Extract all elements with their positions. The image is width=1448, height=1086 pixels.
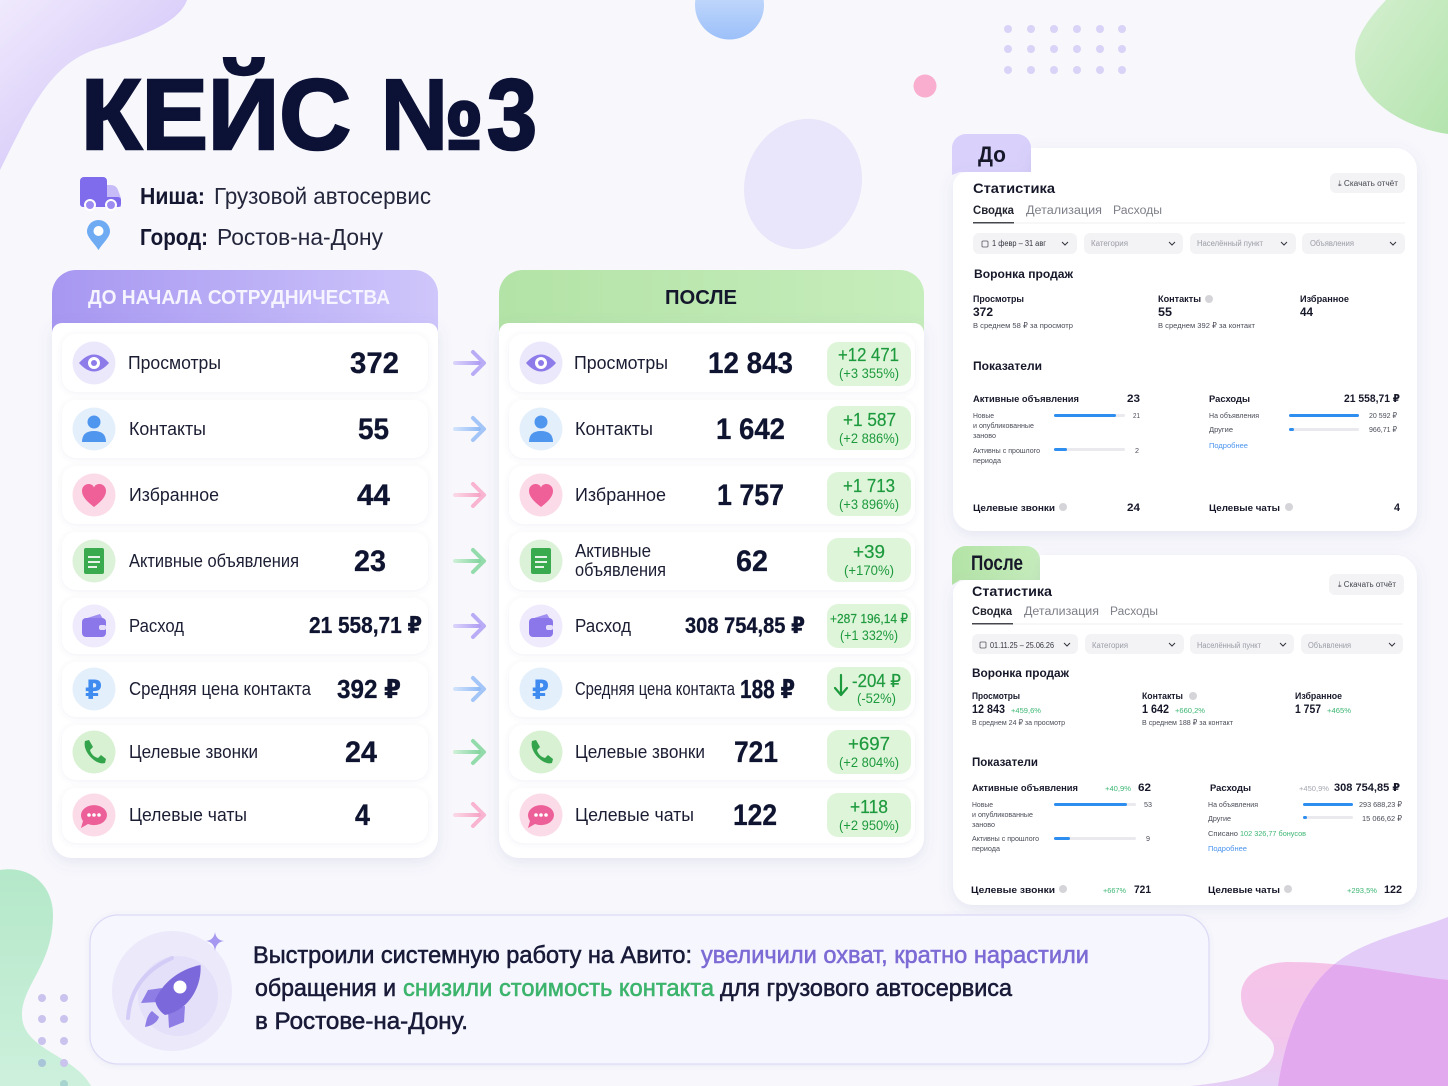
metrics <box>972 755 1402 853</box>
callout text: снизили стоимость контакта <box>403 975 715 1002</box>
filters: 01.11.25 – 25.06.26 <box>990 641 1054 650</box>
icon: map pin <box>87 220 110 250</box>
metrics: 23 <box>1127 393 1140 405</box>
button: download <box>1330 173 1405 193</box>
targeted calls and chats <box>971 884 1402 896</box>
sales funnel: 1 642 <box>1142 704 1169 716</box>
row: Расход <box>62 598 428 654</box>
metrics: Подробнее <box>1209 441 1248 450</box>
row: Средняя цена контакта: Средняя цена контакта <box>129 679 312 699</box>
row: Целевые чаты: Целевые чаты <box>575 805 694 825</box>
callout card <box>90 915 1209 1064</box>
row: Избранное <box>509 466 915 524</box>
row: Активные объявления: (+170%) <box>844 562 894 578</box>
row: Контакты: (+2 886%) <box>839 430 899 446</box>
row: Целевые звонки <box>509 725 915 780</box>
niche row <box>80 177 431 210</box>
row: Целевые чаты: 4 <box>355 799 370 832</box>
arrow: calls <box>453 741 484 763</box>
row: Избранное: Избранное <box>575 485 666 505</box>
targeted calls and chats: 721 <box>1134 884 1151 896</box>
row: Средняя цена контакта: 392 ₽ <box>337 674 401 704</box>
row: Целевые звонки <box>62 725 428 780</box>
row: Просмотры: +12 471 <box>838 345 899 365</box>
metrics: На объявления <box>1208 800 1258 809</box>
niche text: Ниша: <box>140 183 205 209</box>
row: Расход: (+1 332%) <box>840 627 898 643</box>
metrics: +450,9% <box>1299 784 1329 793</box>
sales funnel: Просмотры <box>972 691 1020 701</box>
sales funnel: Воронка продаж <box>972 666 1069 680</box>
icon: truck <box>80 177 121 210</box>
filters <box>973 233 1405 254</box>
targeted calls and chats: 24 <box>1127 502 1141 514</box>
background blob: bottom right purple <box>1278 917 1448 1086</box>
metrics: Активны с прошлого <box>972 834 1039 843</box>
filters: Объявления <box>1310 239 1354 248</box>
sales funnel <box>972 666 1351 727</box>
row: Контакты: Контакты <box>129 419 206 439</box>
sales funnel: Просмотры <box>973 294 1024 304</box>
tabs: Сводка <box>973 205 1015 217</box>
row: Контакты: Контакты <box>575 419 653 439</box>
row: Целевые чаты <box>509 788 915 843</box>
metrics: и опубликованные <box>972 810 1033 819</box>
button: download: ⤓ Скачать отчёт <box>1338 580 1396 589</box>
metrics: Показатели <box>972 755 1038 769</box>
panel header: after <box>499 270 924 345</box>
arrow: views <box>453 352 484 374</box>
row: Активные объявления: Активные <box>575 541 651 561</box>
filters: Категория <box>1092 641 1128 650</box>
filters: Объявления <box>1308 641 1351 650</box>
row: Расход: Расход <box>575 616 631 636</box>
metrics: Расходы <box>1209 394 1250 405</box>
title: 3 <box>487 59 537 171</box>
row: Контакты: 55 <box>358 413 389 446</box>
row: Избранное <box>62 466 428 524</box>
arrow: spend <box>453 615 484 637</box>
targeted calls and chats: 4 <box>1394 502 1401 514</box>
row: Просмотры: (+3 355%) <box>839 365 899 381</box>
row: Активные объявления <box>509 532 915 590</box>
sales funnel: +660,2% <box>1175 706 1205 715</box>
row: Целевые звонки: (+2 804%) <box>839 754 899 770</box>
row: Избранное: (+3 896%) <box>839 496 899 512</box>
background blob: bottom left green <box>0 869 91 1086</box>
background blob: top left lavender <box>0 0 187 170</box>
metrics: Активные объявления <box>972 783 1078 794</box>
callout text: обращения и <box>255 975 396 1002</box>
sales funnel: В среднем 392 ₽ за контакт <box>1158 321 1256 330</box>
metrics: 966,71 ₽ <box>1369 425 1397 434</box>
row: Средняя цена контакта <box>509 662 915 717</box>
row: Просмотры: Просмотры <box>128 353 221 373</box>
row: Целевые звонки: Целевые звонки <box>129 742 258 762</box>
sales funnel: 372 <box>973 307 993 319</box>
callout text: в Ростове-на-Дону. <box>255 1008 468 1035</box>
row: Средняя цена контакта: -204 ₽ <box>852 671 901 691</box>
row: Активные объявления: 62 <box>736 545 768 578</box>
row: Активные объявления: Активные объявления <box>129 551 299 571</box>
tabs: Расходы <box>1113 205 1162 217</box>
targeted calls and chats: 122 <box>1384 884 1402 896</box>
row: Просмотры: 12 843 <box>708 347 793 380</box>
row: Целевые чаты <box>62 788 428 843</box>
metrics: Новые <box>972 800 993 809</box>
metrics: На объявления <box>1209 411 1259 420</box>
heading: statistics: Статистика <box>973 180 1055 196</box>
metrics: 21 558,71 ₽ <box>1344 393 1400 405</box>
sales funnel: В среднем 24 ₽ за просмотр <box>972 718 1065 727</box>
screenshot panel: before <box>952 134 1417 531</box>
callout: conclusion <box>90 915 1209 1064</box>
tab label: До <box>978 142 1006 167</box>
arrow: contacts <box>453 418 484 440</box>
arrow: contact price <box>453 678 484 700</box>
background circle: top blue <box>695 0 764 40</box>
row: Целевые звонки: 721 <box>734 736 778 769</box>
metrics: 293 688,23 ₽ <box>1359 800 1402 809</box>
targeted calls and chats: +293,5% <box>1347 886 1377 895</box>
callout text: для грузового автосервиса <box>720 975 1013 1002</box>
tab label: После <box>971 552 1023 575</box>
row: Активные объявления <box>62 532 428 590</box>
callout text: Выстроили системную работу на Авито: <box>253 942 692 969</box>
row: Целевые чаты: +118 <box>850 797 888 817</box>
callout text <box>253 942 1089 1035</box>
button: download <box>1329 574 1404 595</box>
metrics: 15 066,62 ₽ <box>1362 814 1402 823</box>
tabs <box>972 606 1403 624</box>
targeted calls and chats: Целевые чаты <box>1208 885 1280 896</box>
row: Избранное: 44 <box>357 479 390 512</box>
panel: after <box>499 270 924 858</box>
sales funnel <box>973 267 1349 330</box>
sales funnel: 44 <box>1300 307 1314 319</box>
arrow: chats <box>453 804 484 826</box>
arrow: favourites <box>453 484 484 506</box>
metrics: +40,9% <box>1105 784 1131 793</box>
row: Расход: +287 196,14 ₽ <box>830 611 908 626</box>
callout text: увеличили охват, кратно нарастили <box>701 942 1089 969</box>
title <box>81 58 537 171</box>
city text: Ростов-на-Дону <box>217 224 383 250</box>
row: Средняя цена контакта: Средняя цена контакта <box>575 679 736 699</box>
row: Просмотры <box>62 334 428 392</box>
metrics: и опубликованные <box>973 421 1034 430</box>
row: Контакты: +1 587 <box>843 410 896 430</box>
city text <box>140 224 383 250</box>
tabs: Детализация <box>1024 606 1099 618</box>
sales funnel: Избранное <box>1300 294 1349 304</box>
panel: before <box>52 270 438 858</box>
card: before <box>953 148 1417 531</box>
filters: Населённый пункт <box>1197 641 1261 650</box>
city row <box>87 220 383 250</box>
row: Контакты: 1 642 <box>716 413 785 446</box>
arrow: listings <box>453 550 484 572</box>
metrics: 20 592 ₽ <box>1369 411 1397 420</box>
metrics: 21 <box>1133 411 1140 420</box>
row: Просмотры: Просмотры <box>574 353 668 373</box>
metrics: Новые <box>973 411 994 420</box>
filters: Населённый пункт <box>1197 239 1263 248</box>
metrics: заново <box>972 820 995 829</box>
sales funnel: Избранное <box>1295 691 1342 701</box>
niche text: Грузовой автосервис <box>214 183 431 209</box>
panel body: after <box>499 323 924 858</box>
metrics: Списано <box>1208 829 1238 838</box>
sales funnel: В среднем 58 ₽ за просмотр <box>973 321 1073 330</box>
row: Избранное: Избранное <box>129 485 219 505</box>
title: КЕЙС <box>81 58 351 171</box>
row: Целевые чаты: 122 <box>733 799 777 832</box>
background dot grid: bottom left <box>38 994 68 1086</box>
panel header: before <box>52 270 438 345</box>
metrics: периода <box>972 844 1001 853</box>
heading: statistics: Статистика <box>972 583 1052 599</box>
button: download: ⤓ Скачать отчёт <box>1338 179 1398 188</box>
row: Средняя цена контакта: ₽ <box>85 675 102 705</box>
row: Расход: Расход <box>129 616 184 636</box>
metrics: 53 <box>1144 800 1152 809</box>
tabs <box>973 205 1405 224</box>
tab: После <box>952 546 1040 585</box>
row: Контакты <box>62 400 428 458</box>
metrics: Другие <box>1208 814 1231 823</box>
row: Расход: 308 754,85 ₽ <box>685 613 805 638</box>
row: Избранное: 1 757 <box>717 479 784 512</box>
arrows between panels <box>453 352 484 826</box>
metrics: 62 <box>1138 782 1151 794</box>
sales funnel: 1 757 <box>1295 704 1321 716</box>
row: Средняя цена контакта: ₽ <box>532 675 549 705</box>
background dot grid: top <box>1004 25 1126 74</box>
sales funnel: Контакты <box>1158 294 1201 304</box>
row: Активные объявления: объявления <box>575 560 666 580</box>
row: Активные объявления: +39 <box>853 542 885 562</box>
metrics: 9 <box>1146 834 1150 843</box>
row: Расход <box>509 598 915 654</box>
metrics: 2 <box>1135 446 1139 455</box>
tabs: Расходы <box>1110 606 1158 618</box>
sales funnel: Контакты <box>1142 691 1183 701</box>
targeted calls and chats: Целевые звонки <box>971 885 1055 896</box>
city text: Город: <box>140 224 208 250</box>
tabs: Сводка <box>972 606 1013 618</box>
row: Активные объявления: 23 <box>354 545 386 578</box>
row: Просмотры <box>509 334 915 392</box>
filters: Категория <box>1091 239 1128 248</box>
row: Целевые звонки: Целевые звонки <box>575 742 705 762</box>
targeted calls and chats: +667% <box>1103 886 1126 895</box>
sales funnel: В среднем 188 ₽ за контакт <box>1142 718 1234 727</box>
title: № <box>381 59 484 171</box>
metrics: Активные объявления <box>973 394 1079 405</box>
row: Средняя цена контакта: 188 ₽ <box>740 674 795 704</box>
metrics: периода <box>973 456 1002 465</box>
metrics: 308 754,85 ₽ <box>1334 782 1400 794</box>
card: after <box>953 555 1417 905</box>
row: Просмотры: 372 <box>350 347 399 380</box>
row: Целевые звонки: 24 <box>345 736 377 769</box>
panel header: before: ДО НАЧАЛА СОТРУДНИЧЕСТВА <box>88 287 390 309</box>
targeted calls and chats: Целевые звонки <box>973 503 1055 514</box>
targeted calls and chats: Целевые чаты <box>1209 503 1280 514</box>
row: Целевые звонки: +697 <box>848 734 890 754</box>
background blob: pink and purple overlap <box>1278 964 1448 1086</box>
filters <box>972 634 1403 654</box>
background dot: pink <box>914 74 936 98</box>
row: Целевые чаты: Целевые чаты <box>129 805 247 825</box>
metrics: Активны с прошлого <box>973 446 1040 455</box>
targeted calls and chats <box>973 502 1401 514</box>
row: Контакты <box>509 400 915 458</box>
metrics: Показатели <box>973 359 1042 373</box>
background blob: bottom right pink <box>1190 962 1448 1086</box>
row: Средняя цена контакта: (-52%) <box>857 690 896 706</box>
metrics: Подробнее <box>1208 844 1247 853</box>
row: Расход: 21 558,71 ₽ <box>309 612 422 638</box>
metrics <box>973 359 1400 465</box>
sales funnel: +465% <box>1327 706 1351 715</box>
panel body: before <box>52 323 438 858</box>
background blob: lavender oval <box>726 102 880 266</box>
screenshot panel: after <box>952 546 1417 905</box>
metrics: 102 326,77 бонусов <box>1240 829 1306 838</box>
metrics: заново <box>973 431 996 440</box>
metrics: Другие <box>1209 425 1233 434</box>
tab: До <box>952 134 1031 175</box>
icon: rocket <box>112 931 232 1051</box>
sales funnel: 12 843 <box>972 704 1005 716</box>
background blob: top right green <box>1355 0 1448 134</box>
sales funnel: 55 <box>1158 307 1173 319</box>
metrics: Расходы <box>1210 783 1251 794</box>
sales funnel: +459,6% <box>1011 706 1041 715</box>
panel header: after: ПОСЛЕ <box>665 287 737 309</box>
row: Избранное: +1 713 <box>843 476 895 496</box>
tabs: Детализация <box>1026 205 1102 217</box>
sales funnel: Воронка продаж <box>974 267 1073 281</box>
row: Целевые чаты: (+2 950%) <box>839 817 899 833</box>
filters: 1 февр – 31 авг <box>992 239 1046 248</box>
row: Средняя цена контакта <box>62 662 428 717</box>
